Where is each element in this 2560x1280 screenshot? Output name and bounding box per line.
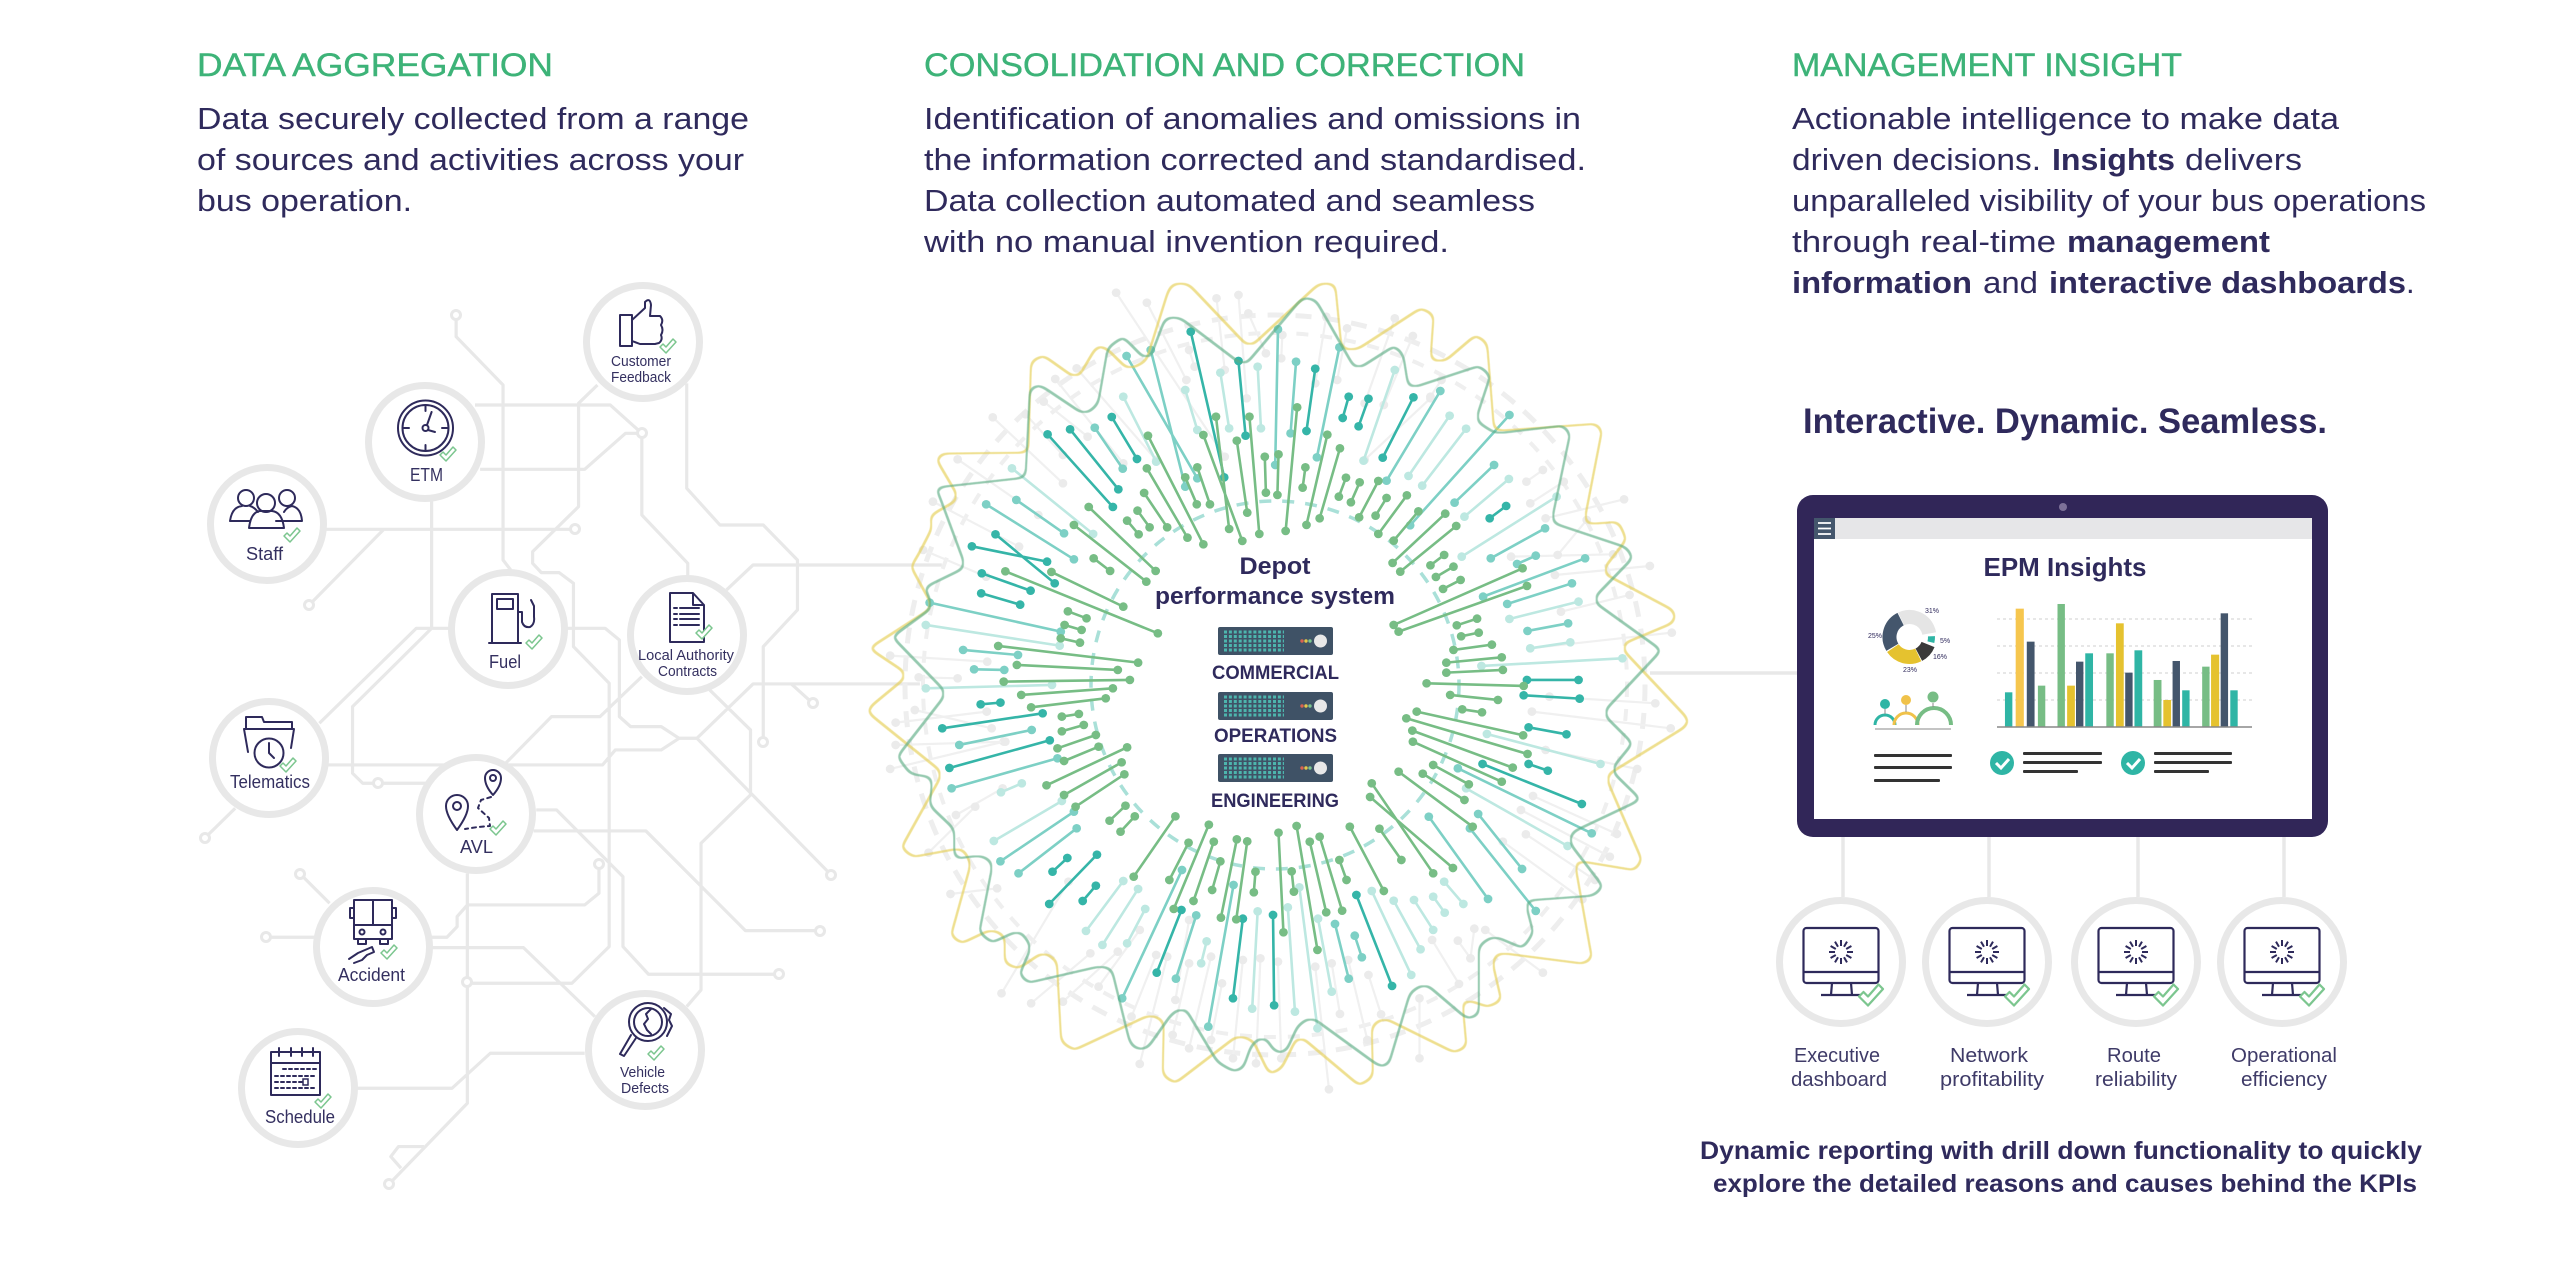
dashboard: executive: Executive bbox=[1794, 1045, 1880, 1067]
server: commercial bbox=[1212, 627, 1339, 684]
dashed rings bbox=[905, 315, 1645, 1055]
dashboard: route reliability bbox=[2074, 900, 2198, 1091]
donut chart bbox=[1868, 608, 1950, 674]
node: accident: Accident bbox=[338, 965, 405, 985]
node: staff bbox=[210, 468, 324, 580]
node: accident bbox=[316, 890, 430, 1004]
dashboard: executive: dashboard bbox=[1791, 1069, 1887, 1091]
title: depot performance system: Depot bbox=[1240, 553, 1310, 580]
donut chart: 31% bbox=[1925, 608, 1939, 615]
server: engineering: ENGINEERING bbox=[1211, 791, 1339, 812]
node: AVL: AVL bbox=[460, 837, 493, 857]
node: AVL bbox=[420, 758, 532, 870]
wave outline: yellow bbox=[867, 283, 1689, 1087]
title: depot performance system: performance system bbox=[1155, 583, 1395, 610]
text block: dynamic reporting note bbox=[1700, 1137, 2422, 1198]
text block: management insight description: driven decisions. bbox=[1792, 142, 2041, 177]
server: operations: OPERATIONS bbox=[1214, 726, 1337, 747]
wave outline: green bbox=[890, 297, 1664, 1073]
dashboard: network profitability bbox=[1926, 900, 2048, 1091]
text block: management insight description: Actionable intelligence to make data bbox=[1792, 101, 2340, 136]
donut chart: 23% bbox=[1903, 667, 1917, 674]
node: vehicle defects bbox=[588, 994, 702, 1106]
network: transit-map connector lines bbox=[200, 310, 942, 1188]
radial lines: grey bbox=[890, 293, 1672, 1089]
donut chart: 16% bbox=[1933, 654, 1947, 661]
text block: dynamic reporting note: explore the detailed reasons and causes behind the KPIs bbox=[1713, 1170, 2417, 1198]
server: engineering bbox=[1211, 754, 1339, 812]
dashboard: operational efficiency: efficiency bbox=[2241, 1069, 2327, 1091]
node: telematics bbox=[212, 702, 326, 814]
heading: consolidation and correction: CONSOLIDATION AND CORRECTION bbox=[924, 47, 1525, 83]
text block: management insight description: through real-time bbox=[1792, 224, 2056, 259]
node: customer feedback: Feedback bbox=[611, 369, 671, 386]
text placeholder lines bbox=[1874, 752, 2232, 782]
icon: teal check left bbox=[1990, 751, 2014, 775]
text block: data aggregation description: Data securely collected from a range bbox=[197, 101, 749, 136]
node: telematics: Telematics bbox=[230, 772, 310, 792]
node: local authority contracts bbox=[630, 578, 744, 692]
donut chart: 5% bbox=[1940, 638, 1950, 645]
donut chart: 25% bbox=[1868, 633, 1882, 640]
node: customer feedback: Customer bbox=[611, 353, 671, 370]
text block: management insight description: information bbox=[1792, 265, 1972, 300]
node: fuel bbox=[452, 572, 564, 686]
node: vehicle defects: Defects bbox=[621, 1080, 669, 1097]
dashboard: route reliability: reliability bbox=[2095, 1069, 2177, 1091]
dashboard: operational efficiency bbox=[2220, 900, 2344, 1091]
text block: management insight description: management bbox=[2067, 224, 2270, 259]
text block: management insight description: delivers bbox=[2185, 142, 2302, 177]
text block: management insight description: interactive dashboards bbox=[2049, 265, 2406, 300]
node: ETM bbox=[368, 386, 482, 498]
text block: consolidation description: with no manual invention required. bbox=[923, 224, 1449, 259]
node: schedule bbox=[242, 1032, 354, 1144]
text block: data aggregation description bbox=[197, 101, 749, 218]
text block: management insight description: Insights bbox=[2052, 142, 2175, 177]
node: schedule: Schedule bbox=[265, 1107, 335, 1127]
text block: data aggregation description: bus operation. bbox=[197, 183, 412, 218]
chart: radial data consolidation burst bbox=[867, 283, 1689, 1089]
dashboard: route reliability: Route bbox=[2107, 1045, 2161, 1067]
server: operations bbox=[1214, 692, 1337, 747]
node: fuel: Fuel bbox=[489, 652, 521, 672]
text block: consolidation description: the information corrected and standardised. bbox=[924, 142, 1586, 177]
tablet: EPM Insights dashboard bbox=[1797, 495, 2328, 837]
bar chart bbox=[1997, 604, 2252, 727]
node: local authority contracts: Contracts bbox=[658, 663, 717, 680]
heading: interactive dynamic seamless: Interactive. Dynamic. Seamless. bbox=[1803, 402, 2327, 441]
heading: data aggregation: DATA AGGREGATION bbox=[197, 47, 553, 83]
node: local authority contracts: Local Authority bbox=[638, 647, 734, 664]
node: vehicle defects: Vehicle bbox=[620, 1064, 665, 1081]
text block: consolidation description: Data collection automated and seamless bbox=[924, 183, 1535, 218]
connectors: tablet to dashboards bbox=[1843, 835, 2284, 897]
radial lines: strong teal bbox=[942, 332, 1582, 1005]
heading: management insight: MANAGEMENT INSIGHT bbox=[1792, 47, 2182, 83]
icon: teal check right bbox=[2121, 751, 2145, 775]
node: staff: Staff bbox=[246, 544, 284, 564]
radial lines: light teal bbox=[926, 367, 1622, 1028]
dashboard: operational efficiency: Operational bbox=[2231, 1045, 2337, 1067]
text block: management insight description: unparalleled visibility of your bus operations bbox=[1792, 183, 2426, 218]
radial lines: medium teal bbox=[930, 329, 1592, 1027]
text block: consolidation description bbox=[923, 101, 1586, 259]
text block: management insight description bbox=[1792, 101, 2426, 300]
server: commercial: COMMERCIAL bbox=[1212, 663, 1339, 684]
dashboard: executive bbox=[1780, 900, 1902, 1091]
text block: data aggregation description: of sources and activities across your bbox=[197, 142, 744, 177]
title: depot performance system bbox=[1155, 553, 1395, 610]
node: ETM: ETM bbox=[410, 465, 443, 485]
text block: consolidation description: Identification of anomalies and omissions in bbox=[924, 101, 1581, 136]
dashboard: network profitability: profitability bbox=[1940, 1069, 2044, 1091]
arc infographic bbox=[1875, 692, 1951, 729]
icon: menu button bbox=[1814, 518, 1835, 539]
node: customer feedback bbox=[586, 286, 700, 398]
text block: management insight description: and bbox=[1983, 265, 2038, 300]
radial lines: green bbox=[998, 407, 1528, 950]
connector: burst to tablet bbox=[1650, 671, 1803, 675]
screen title: EPM Insights bbox=[1984, 552, 2146, 582]
text block: dynamic reporting note: Dynamic reporting with drill down functionality to quickly bbox=[1700, 1137, 2422, 1165]
text block: management insight description: . bbox=[2406, 265, 2415, 300]
dashboard: network profitability: Network bbox=[1950, 1045, 2029, 1067]
